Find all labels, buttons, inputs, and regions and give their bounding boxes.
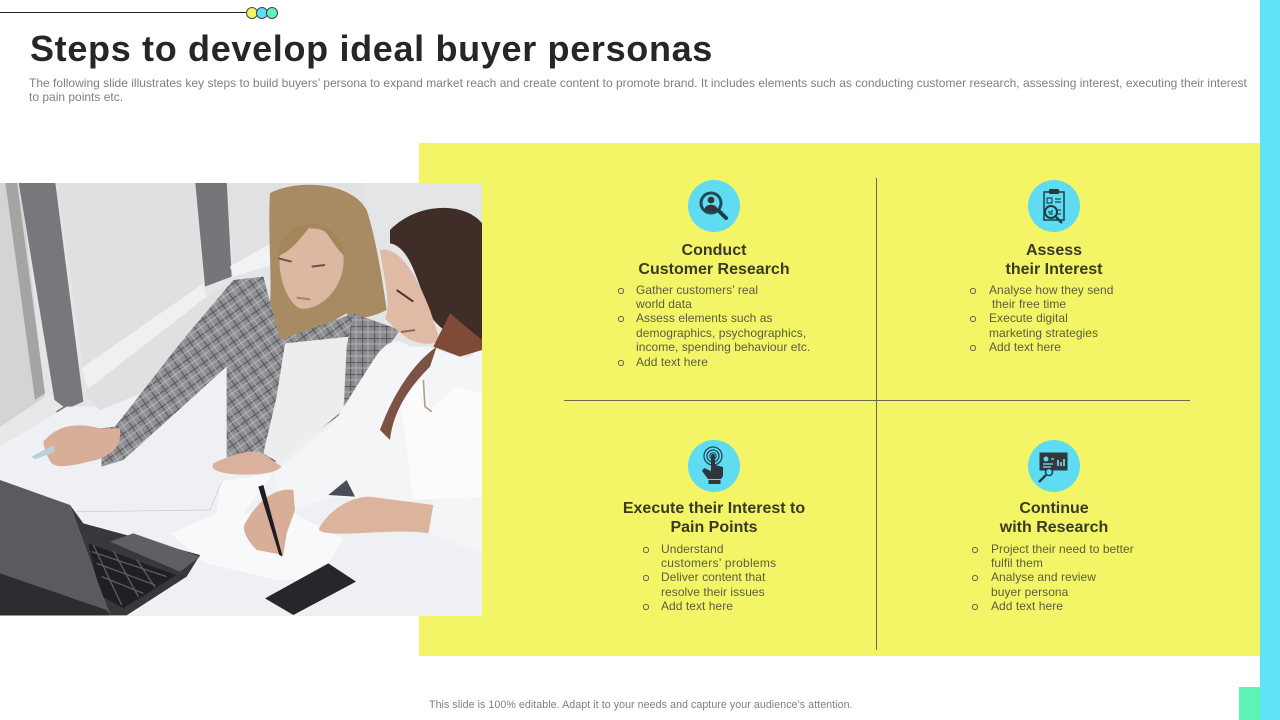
heading — [638, 242, 790, 278]
bullet list — [972, 542, 1134, 613]
icon: monitor with magnifier — [1028, 440, 1080, 492]
panel: execute their interest — [623, 440, 805, 613]
bullet list: Add text here — [991, 599, 1063, 613]
bullet list: customers’ problems — [661, 556, 776, 570]
bullet list — [970, 283, 1113, 354]
bullet list: fulfil them — [991, 556, 1043, 570]
bullet list: buyer persona — [991, 585, 1068, 599]
bullet list: Execute digital — [989, 311, 1068, 325]
bullet list — [618, 283, 810, 369]
icon: hand touching — [688, 440, 740, 492]
bullet list: Analyse and review — [991, 570, 1096, 584]
bullet list: Add text here — [636, 355, 708, 369]
subtitle description — [29, 76, 1247, 104]
decorative line with three dots — [0, 7, 278, 19]
bullet list: Gather customers’ real — [636, 283, 758, 297]
heading: with Research — [1000, 519, 1108, 536]
heading: Execute their Interest to — [623, 500, 805, 517]
right accent bar — [1260, 0, 1280, 720]
heading: Assess — [1026, 242, 1082, 259]
bullet list: marketing strategies — [989, 326, 1098, 340]
heading — [623, 500, 805, 536]
bullet list: Add text here — [661, 599, 733, 613]
subtitle description: The following slide illustrates key steps to build buyers’ persona to expand market reach and create content to promote brand. It includes elements such as conducting customer research, assessing interest, executing their interest — [29, 76, 1247, 90]
title: Steps to develop ideal buyer personas — [30, 28, 713, 69]
photo: two women working at a laptop — [0, 183, 482, 616]
corner accent block — [1239, 687, 1260, 720]
panel: conduct customer research — [618, 180, 810, 369]
icon: clipboard with magnifier — [1028, 180, 1080, 232]
heading — [1006, 242, 1102, 278]
heading: Pain Points — [670, 519, 758, 536]
heading: Continue — [1019, 500, 1089, 517]
bullet list: income, spending behaviour etc. — [636, 340, 810, 354]
panel: assess their interest — [970, 180, 1113, 354]
papers on table — [77, 473, 343, 580]
bullet list: Add text here — [989, 340, 1061, 354]
heading: Customer Research — [638, 261, 790, 278]
bullet list: their free time — [992, 297, 1066, 311]
bullet list: Deliver content that — [661, 570, 765, 584]
bullet list: Analyse how they send — [989, 283, 1113, 297]
panel: continue with research — [972, 440, 1134, 613]
bullet list: Understand — [661, 542, 724, 556]
bullet list: Assess elements such as — [636, 311, 773, 325]
heading: Conduct — [682, 242, 746, 259]
bullet list: demographics, psychographics, — [636, 326, 806, 340]
woman two — [244, 208, 482, 555]
divider: horizontal — [564, 400, 1190, 401]
icon: magnifier with person — [688, 180, 740, 232]
panel: yellow background — [419, 143, 1260, 656]
bullet list: Project their need to better — [991, 542, 1134, 556]
bullet list: world data — [636, 297, 692, 311]
pen — [258, 485, 283, 557]
footer note: This slide is 100% editable. Adapt it to your needs and capture your audience’s attention. — [429, 699, 853, 711]
divider: vertical — [876, 178, 877, 650]
phone — [265, 563, 356, 615]
heading — [1000, 500, 1108, 536]
woman one — [32, 185, 400, 475]
subtitle description: to pain points etc. — [29, 90, 123, 104]
heading: their Interest — [1006, 261, 1102, 278]
bullet list — [643, 542, 776, 613]
bullet list: resolve their issues — [661, 585, 765, 599]
laptop — [0, 480, 200, 615]
